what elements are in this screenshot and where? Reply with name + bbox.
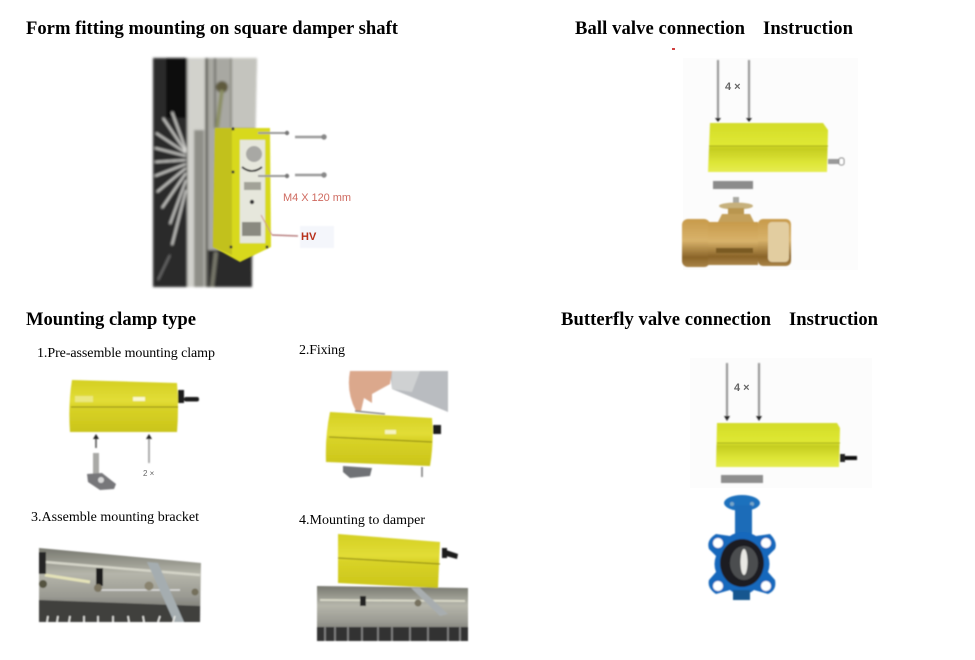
step 1 label: 1.Pre-assemble mounting clamp xyxy=(37,346,215,361)
heading: ball valve connection instruction: Ball valve connection xyxy=(575,18,746,39)
step 2 label: 2.Fixing xyxy=(299,343,345,358)
label: HV: HV xyxy=(301,231,317,243)
step 4 label: 4.Mounting to damper xyxy=(299,513,425,528)
label: 4 times, butterfly valve: 4 × xyxy=(734,382,750,394)
illustration: butterfly valve connection xyxy=(690,358,872,600)
step 3 label: 3.Assemble mounting bracket xyxy=(31,510,199,525)
illustration: pre-assemble mounting clamp xyxy=(69,380,199,490)
heading: butterfly valve connection instruction: Butterfly valve connection xyxy=(561,309,772,330)
heading: form fitting mounting: Form fitting mounting on square damper shaft xyxy=(26,18,399,39)
photo: assemble mounting bracket xyxy=(39,548,201,622)
photo: mounting to damper xyxy=(317,534,468,641)
heading: ball valve connection instruction: Instruction xyxy=(763,18,854,39)
photo: actuator mounted on square damper shaft xyxy=(153,58,351,287)
label: 4 times, ball valve: 4 × xyxy=(725,81,741,93)
mark: small red dot xyxy=(672,48,675,50)
illustration: ball valve connection xyxy=(682,58,858,270)
illustration: fixing with hand xyxy=(326,371,448,478)
label: screw size: M4 X 120 mm xyxy=(283,192,351,204)
label: 2 times: 2 × xyxy=(143,469,155,478)
heading: butterfly valve connection instruction: Instruction xyxy=(789,309,879,330)
heading: mounting clamp type: Mounting clamp type xyxy=(26,309,196,330)
